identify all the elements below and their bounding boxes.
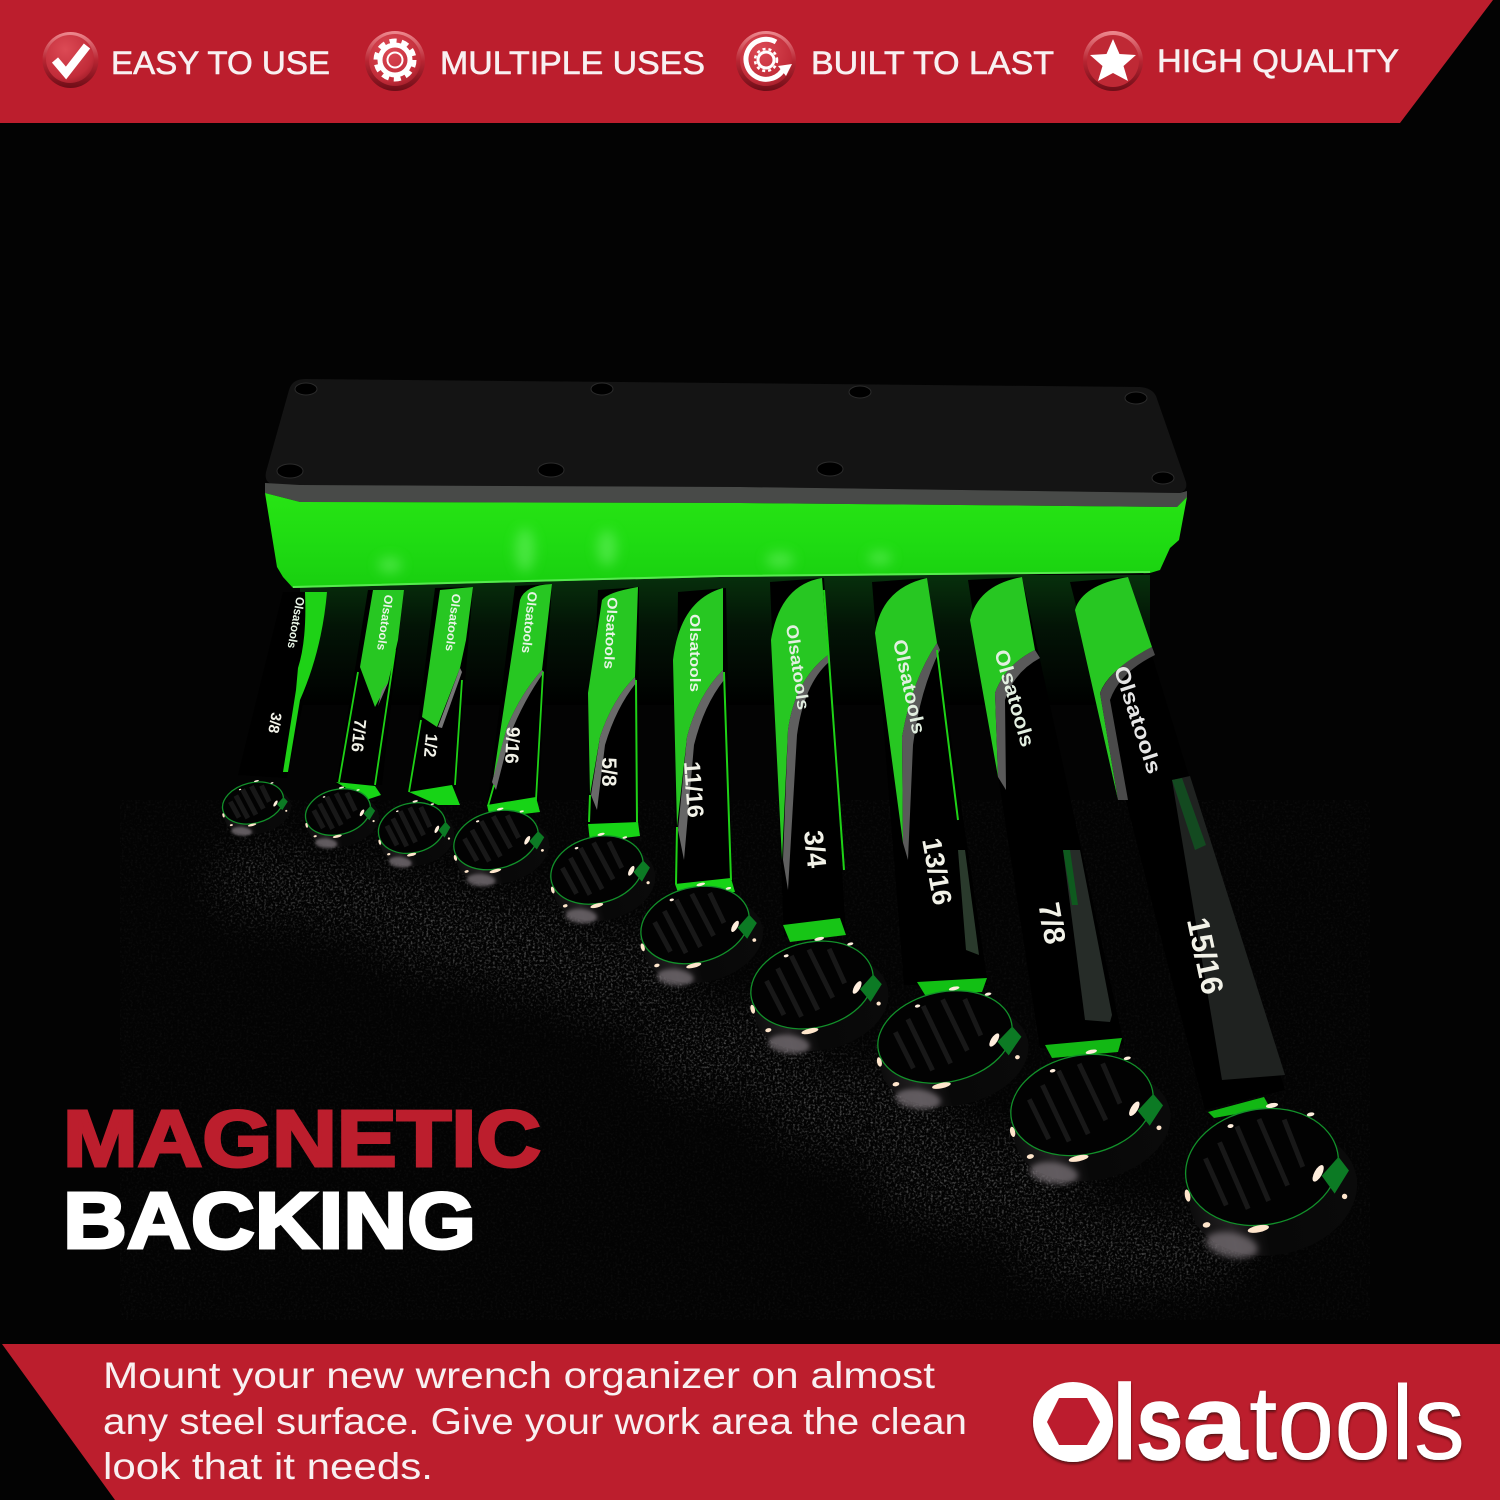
logo: Olsatools: a — [1183, 1364, 1248, 1482]
brand mark: wrench 7: Olsatools — [782, 623, 813, 711]
size label 15/16: 15/16 — [1180, 914, 1230, 997]
brand mark: wrench 10: Olsatools — [1109, 663, 1165, 777]
top banner — [0, 0, 1493, 123]
wrench 6: 11/16 — [629, 588, 772, 997]
size label 5/8: 5/8 — [597, 757, 620, 787]
mounting holes — [277, 383, 1174, 484]
size label 13/16: 13/16 — [916, 836, 958, 907]
brand mark: wrench 9: Olsatools — [989, 647, 1038, 749]
floor texture — [120, 800, 1370, 1320]
wrench 7: 3/4 — [738, 578, 899, 1066]
brand mark: wrench 5: Olsatools — [601, 597, 621, 670]
tray highlights — [378, 528, 892, 573]
icon: gear — [365, 31, 425, 91]
wrench organizer holder — [265, 379, 1187, 588]
logo: Olsatools: tools — [1249, 1364, 1465, 1482]
size label 7/16: 7/16 — [347, 718, 370, 753]
size label 7/8: 7/8 — [1031, 900, 1071, 947]
wrench 3: 1/2 — [371, 587, 473, 875]
description text: any steel surface. Give your work area the clean — [103, 1401, 967, 1442]
wrench 8: 13/16 — [865, 578, 1038, 1122]
heading — [63, 1094, 541, 1265]
wrench 4: 9/16 — [444, 584, 557, 896]
wrench 10: 15/16 — [1070, 577, 1369, 1273]
wrench 5: 5/8 — [540, 587, 664, 934]
brand mark: wrench 2: Olsatools — [374, 594, 396, 652]
label: multiple uses: MULTIPLE USES — [440, 45, 705, 81]
icon: check mark — [42, 32, 98, 88]
label: high quality: HIGH QUALITY — [1157, 43, 1399, 79]
size label 3/4: 3/4 — [798, 829, 832, 869]
bottom banner — [2, 1344, 1500, 1500]
label: built to last: BUILT TO LAST — [811, 45, 1054, 81]
description text — [103, 1355, 967, 1487]
size label 11/16: 11/16 — [679, 760, 709, 818]
brand mark: wrench 1: Olsatools — [284, 596, 307, 650]
size label 9/16: 9/16 — [500, 726, 523, 764]
wrench 1: 3/8 — [216, 592, 327, 842]
logo: Olsatools: ls — [1113, 1364, 1183, 1482]
size label 1/2: 1/2 — [420, 733, 441, 758]
description text: Mount your new wrench organizer on almost — [103, 1355, 936, 1396]
brand mark: wrench 8: Olsatools — [888, 638, 929, 736]
icon: cycle gear — [736, 31, 796, 91]
brand mark: wrench 4: Olsatools — [519, 591, 540, 654]
heading line: magnetic: MAGNETIC — [63, 1094, 541, 1183]
wrench 9: 7/8 — [968, 577, 1182, 1198]
icon: star — [1083, 31, 1143, 91]
heading line: backing: BACKING — [63, 1176, 476, 1265]
logo: Olsatools — [1033, 1364, 1465, 1482]
magnetic top face — [266, 379, 1186, 493]
brand mark: wrench 6: Olsatools — [686, 614, 703, 692]
description text: look that it needs. — [103, 1446, 433, 1487]
label: easy to use: EASY TO USE — [111, 45, 330, 81]
grey edge — [265, 483, 1187, 507]
brand mark: wrench 3: Olsatools — [442, 593, 463, 652]
green tray — [265, 493, 1187, 588]
size label 3/8: 3/8 — [264, 711, 285, 735]
green glow between wrenches — [300, 575, 1150, 705]
wrench 2: 7/16 — [298, 590, 404, 855]
